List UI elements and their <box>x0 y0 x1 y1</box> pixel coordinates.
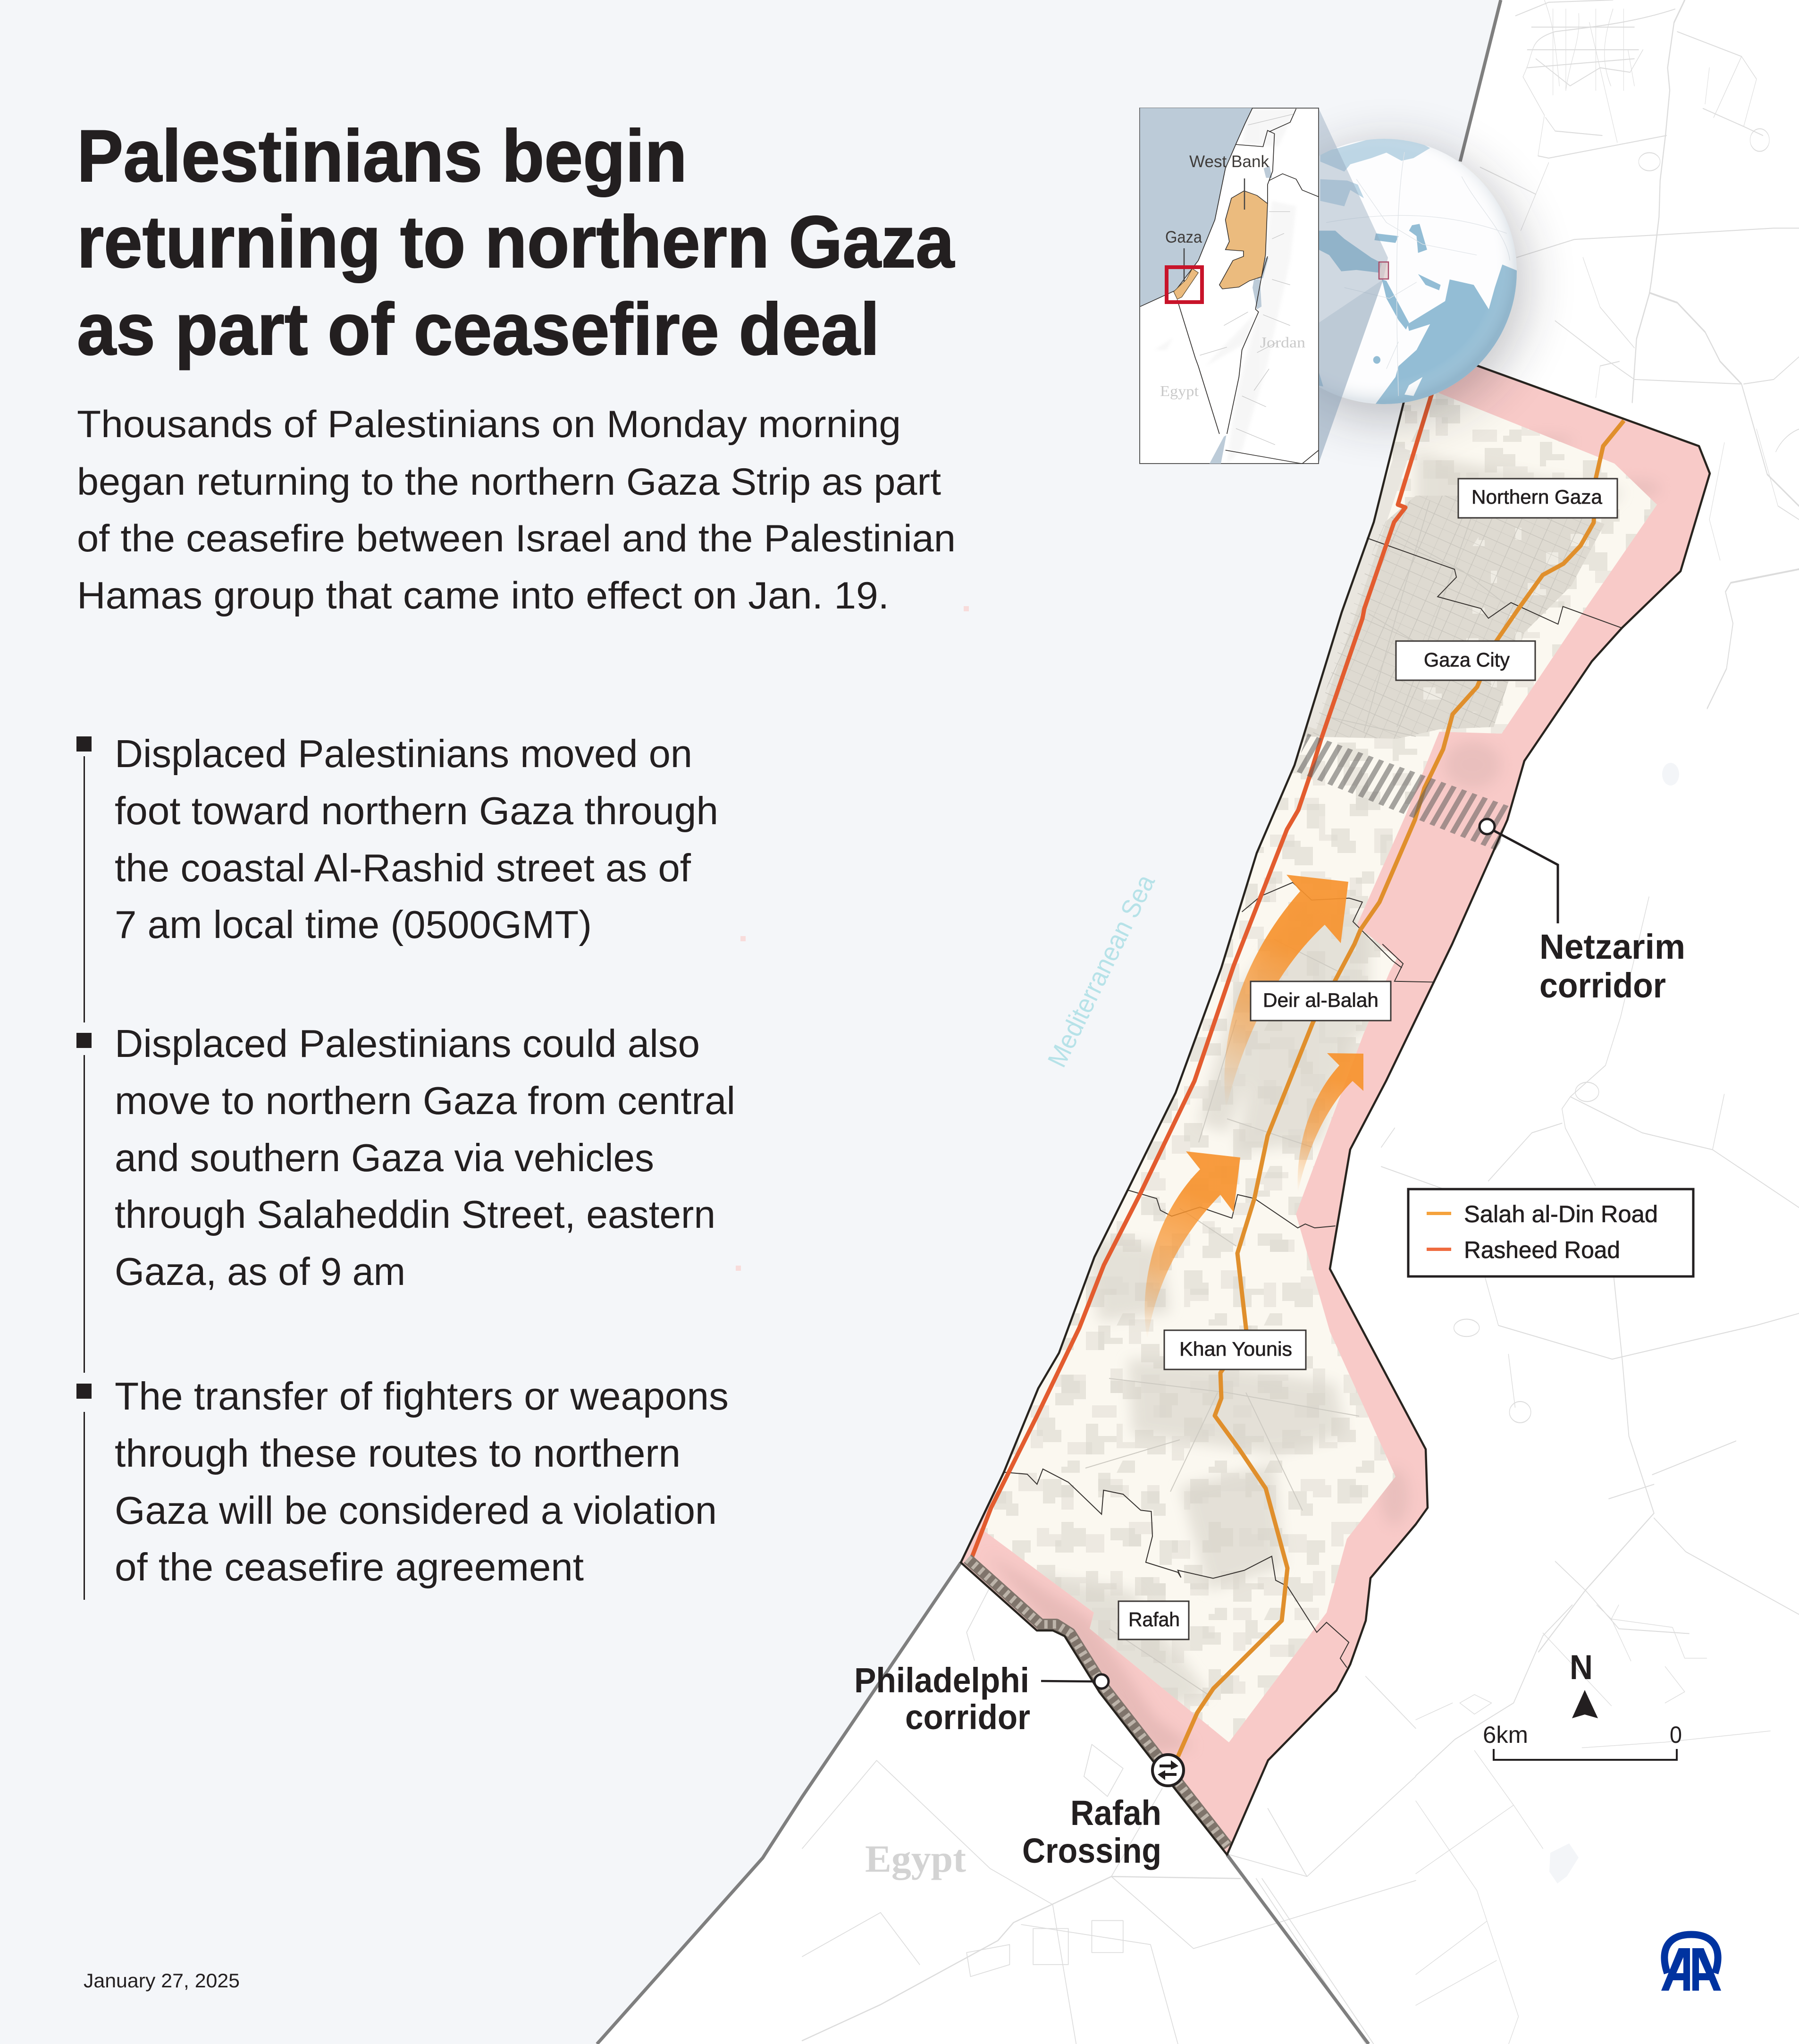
leader lines <box>1184 178 1244 282</box>
bullet 3 <box>76 1374 729 1600</box>
coast and border lines beyond Gaza <box>597 0 1501 2044</box>
label: Khan Younis: Khan Younis <box>1179 1338 1292 1360</box>
locator box on globe <box>1379 262 1388 279</box>
sea on inset <box>1140 108 1253 306</box>
label: Deir al-Balah <box>1251 981 1391 1021</box>
date: January 27, 2025 <box>84 1969 240 1992</box>
coastal light strip <box>1310 448 1404 727</box>
district borders <box>1004 538 1622 1668</box>
bullet 2: and southern Gaza via vehicles <box>115 1136 654 1180</box>
inset map <box>1140 108 1319 464</box>
legend: Rasheed Road <box>1464 1237 1620 1263</box>
magnifier cone <box>1319 108 1388 464</box>
callout: Netzarim corridor: Netzarim <box>1539 927 1685 966</box>
legend <box>1408 1189 1693 1276</box>
scale bar: 0 <box>1670 1722 1682 1748</box>
bullet 2: through Salaheddin Street, eastern <box>115 1192 715 1236</box>
built-up marks in the buffer zone <box>1380 435 1661 1525</box>
label: Rafah <box>1118 1601 1189 1639</box>
label: Deir al-Balah: Deir al-Balah <box>1263 989 1379 1011</box>
pale inland water bodies <box>1549 529 1679 1884</box>
scale bar <box>1483 1722 1682 1760</box>
Gaza on inset <box>1174 269 1198 299</box>
bullet 2: move to northern Gaza from central <box>115 1079 735 1123</box>
callout: Netzarim corridor <box>1480 819 1685 1005</box>
north arrow <box>1570 1648 1598 1718</box>
graticule and borders on globe <box>1326 152 1510 396</box>
inset map: Gaza <box>1165 228 1202 246</box>
bullet 3: of the ceasefire agreement <box>115 1545 584 1589</box>
north arrow: N <box>1570 1648 1593 1687</box>
soft built-up areas <box>1038 453 1623 1709</box>
Madagascar <box>1404 377 1422 396</box>
bullet 1: 7 am local time (0500GMT) <box>115 903 592 946</box>
bullet 2 <box>76 1022 735 1373</box>
label: Gaza City <box>1396 641 1535 680</box>
label: Gaza City: Gaza City <box>1424 649 1510 671</box>
title: Palestinians begin <box>77 115 687 197</box>
bullet 3: The transfer of fighters or weapons <box>115 1374 729 1418</box>
callout: Philadelphi corridor: Philadelphi <box>854 1661 1029 1700</box>
bullet 1: Displaced Palestinians moved on <box>115 732 692 776</box>
intro paragraph: Hamas group that came into effect on Jan. 19. <box>77 574 889 617</box>
title: as part of ceasefire deal <box>77 288 880 371</box>
Philadelphi corridor hatching <box>967 1559 1228 1847</box>
intro paragraph: began returning to the northern Gaza Strip as part <box>77 461 941 503</box>
red locator square <box>1167 267 1202 302</box>
Salah al-Din Road <box>1178 421 1624 1757</box>
label: Khan Younis <box>1164 1330 1306 1369</box>
callout: Rafah Crossing: Crossing <box>1022 1831 1161 1870</box>
title <box>77 115 955 371</box>
seas on globe <box>1314 139 1519 407</box>
street grid <box>1312 496 1605 739</box>
bullet 2: Displaced Palestinians could also <box>115 1022 700 1065</box>
label: Egypt: Egypt <box>865 1837 966 1880</box>
title: returning to northern Gaza <box>77 201 955 283</box>
logo: AA <box>1661 1934 1721 1991</box>
scale bar: 6km <box>1483 1722 1528 1748</box>
Netzarim corridor hatching <box>1295 734 1509 851</box>
callout: Philadelphi corridor: corridor <box>905 1698 1030 1737</box>
scattered built-up blocks <box>981 399 1657 1736</box>
globe shadow <box>1255 149 1524 418</box>
callout: Netzarim corridor: corridor <box>1539 966 1666 1005</box>
callout: Rafah Crossing <box>1022 1755 1184 1870</box>
inset map: Jordan <box>1260 334 1305 351</box>
intro paragraph <box>77 403 956 617</box>
bullet 3: Gaza will be considered a violation <box>115 1488 717 1532</box>
bullet 3: through these routes to northern <box>115 1431 681 1475</box>
terrain shading <box>1155 109 1296 464</box>
Rasheed Road <box>968 385 1435 1566</box>
callout: Rafah Crossing: Rafah <box>1070 1793 1161 1833</box>
arrow: movement north 2 <box>1145 1151 1240 1339</box>
intro paragraph: Thousands of Palestinians on Monday morning <box>77 403 901 446</box>
West Bank <box>1219 191 1268 289</box>
arrow: movement north 1 <box>1224 875 1348 1108</box>
bullet 1: foot toward northern Gaza through <box>115 789 718 833</box>
callout: Philadelphi corridor <box>854 1661 1109 1737</box>
globe <box>1252 139 1519 407</box>
built-up band along the Rafah border <box>1005 1570 1183 1752</box>
bullet 1: the coastal Al-Rashid street as of <box>115 846 691 890</box>
label: Rafah: Rafah <box>1128 1608 1180 1630</box>
map: Gaza Strip <box>960 365 1711 1856</box>
inset labels: West Bank <box>1189 152 1269 171</box>
Gaza outline <box>961 345 1710 1855</box>
dense city fabric <box>1303 496 1605 739</box>
label: Mediterranean Sea: Mediterranean Sea <box>1042 870 1160 1072</box>
label: Northern Gaza <box>1458 479 1617 518</box>
residential interior <box>980 393 1657 1742</box>
borders on inset <box>1140 108 1319 464</box>
intro paragraph: of the ceasefire between Israel and the Palestinian <box>77 517 956 560</box>
inset map: Egypt <box>1160 382 1199 399</box>
stray marks <box>736 606 969 1271</box>
gulf and lakes on inset <box>1210 166 1272 464</box>
buffer zone <box>961 345 1710 1855</box>
legend: Salah al-Din Road <box>1464 1201 1658 1227</box>
bullet 2: Gaza, as of 9 am <box>115 1250 405 1293</box>
arrow: movement north 3 <box>1298 1053 1363 1193</box>
label: Northern Gaza: Northern Gaza <box>1471 486 1603 508</box>
road network on surrounding land <box>802 0 1799 2044</box>
bullet 1 <box>76 732 718 1022</box>
